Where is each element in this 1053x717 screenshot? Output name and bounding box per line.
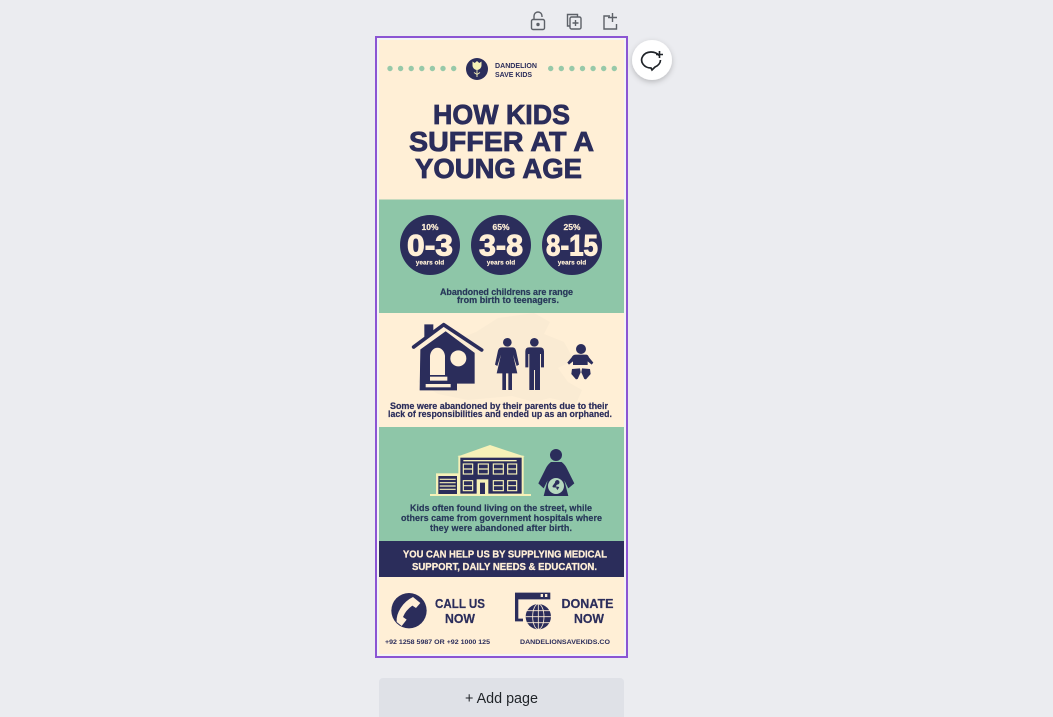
- age circle 8-15: [542, 215, 602, 275]
- icon: phone: [391, 593, 427, 628]
- hospitals caption: they were abandoned after birth.: [430, 523, 572, 533]
- comment button: [632, 40, 672, 80]
- panel: age ranges: [379, 200, 624, 313]
- icon: father: [525, 338, 544, 390]
- donate text: [562, 597, 614, 626]
- donate text: DONATE: [562, 597, 614, 611]
- age circle 3-8: 65%: [492, 222, 510, 232]
- age circle 8-15: 25%: [563, 222, 581, 232]
- dotted line right: [548, 66, 617, 71]
- world map backdrop: [418, 313, 582, 404]
- age caption: from birth to teenagers.: [457, 295, 559, 305]
- icon: mother: [495, 338, 519, 390]
- icon: duplicate: [568, 14, 581, 29]
- brand name: DANDELION: [495, 63, 537, 70]
- add page button: + Add page: [465, 690, 538, 707]
- title: SUFFER AT A: [409, 126, 594, 157]
- age caption: Abandoned childrens are range: [440, 287, 573, 297]
- title: [409, 99, 594, 184]
- icon: lock: [532, 12, 544, 30]
- icon: baby: [567, 344, 593, 379]
- parents caption: Some were abandoned by their parents due to their: [390, 401, 608, 411]
- parents caption: [388, 401, 612, 419]
- age circle 3-8: years old: [487, 260, 515, 266]
- banner: call to help: SUPPORT, DAILY NEEDS & EDUCATION.: [412, 561, 597, 573]
- icon: pregnant woman: [538, 449, 574, 496]
- brand name: SAVE KIDS: [495, 72, 532, 79]
- icon: building: [430, 445, 531, 496]
- call us text: CALL US: [435, 597, 485, 611]
- dotted line left: [387, 66, 456, 71]
- panel: contact: [379, 577, 624, 654]
- call us text: [435, 597, 485, 626]
- add page button: [379, 678, 624, 717]
- phone numbers: +92 1258 5987 OR +92 1000 125: [385, 639, 490, 646]
- age circle 3-8: 3-8: [479, 230, 523, 262]
- banner: call to help: YOU CAN HELP US BY SUPPLYING MEDICAL: [403, 548, 608, 560]
- age circle 0-3: years old: [416, 260, 444, 266]
- banner: call to help: [379, 541, 624, 577]
- website: DANDELIONSAVEKIDS.CO: [520, 639, 610, 646]
- call us text: NOW: [445, 612, 475, 626]
- age circle 0-3: 0-3: [407, 230, 453, 262]
- age circle 3-8: [471, 215, 531, 275]
- selection border: [376, 37, 627, 657]
- icon: dandelion logo: [466, 58, 488, 80]
- icon: add page: [604, 13, 617, 29]
- title: YOUNG AGE: [415, 153, 582, 184]
- panel: hospitals: [379, 427, 624, 541]
- age circle 0-3: 10%: [421, 222, 439, 232]
- hospitals caption: Kids often found living on the street, while: [410, 503, 592, 513]
- donate text: NOW: [574, 612, 604, 626]
- icon: house: [414, 324, 482, 390]
- brand name: [495, 63, 537, 79]
- age circle 8-15: 8-15: [546, 230, 598, 262]
- panel: header and title: [379, 40, 624, 200]
- age circle 0-3: [400, 215, 460, 275]
- hospitals caption: others came from government hospitals where: [401, 513, 602, 523]
- age caption: [440, 287, 573, 305]
- icon: web globe: [515, 593, 551, 629]
- title: HOW KIDS: [433, 99, 570, 130]
- toolbar icons: [532, 12, 617, 30]
- parents caption: lack of responsibilities and ended up as an orphaned.: [388, 409, 612, 419]
- hospitals caption: [401, 503, 602, 533]
- age circle 8-15: years old: [558, 260, 586, 266]
- panel: parents: [379, 313, 624, 427]
